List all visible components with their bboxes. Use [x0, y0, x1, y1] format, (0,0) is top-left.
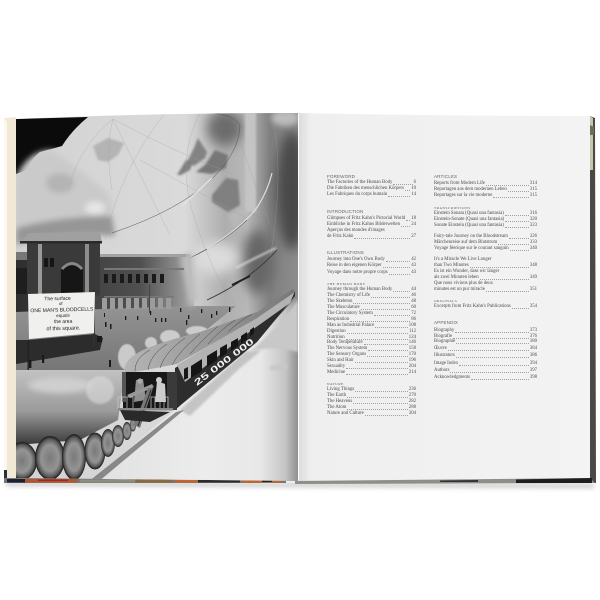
originals entry: Excerpts from Fritz Kahn's Publications [434, 304, 511, 309]
human body entries: Digestion [327, 328, 346, 334]
carriage number: 25 000 000 [192, 336, 256, 388]
articles entries: Reportagen aus dem modernen Leben [434, 187, 507, 192]
billboard: ONE MAN'S BLOODCELLS [30, 307, 94, 314]
introduction entries: 24 [411, 222, 416, 227]
introduction entries: Einblicke in Fritz Kahns Bilderwelten [327, 222, 400, 227]
subheading: nature: NATURE [327, 382, 344, 386]
human body entries: 170 [409, 352, 416, 357]
human body entries: 60 [411, 305, 416, 310]
contents column: right [434, 174, 537, 380]
foreword entries: Les Fabriques du corps humain [327, 192, 387, 197]
right page fore-edge and cover [295, 116, 596, 484]
articles entries: 315 [530, 193, 537, 198]
engineers on platform [127, 377, 166, 428]
introduction entries: de Fritz Kahn [327, 234, 353, 239]
subheading: the human body: THE HUMAN BODY [327, 282, 366, 286]
human body entries: The Musculature [327, 305, 360, 310]
foreword entries: 14 [411, 192, 416, 197]
orbit rails on the globe [112, 113, 277, 300]
heading: illustrations: ILLUSTRATIONS [327, 250, 364, 255]
human body entries: 158 [409, 346, 416, 351]
platform railings [118, 397, 168, 410]
human body entries: Body Temperature [327, 340, 363, 345]
miracle entries [434, 256, 537, 292]
articles entries: 315 [530, 187, 537, 192]
human body entries: The Sensory Organs [327, 352, 366, 357]
billboard: of [59, 301, 63, 306]
subheading: transcriptions: TRANSCRIPTIONS [434, 206, 471, 210]
right page [299, 113, 590, 481]
human body entries: Respiration [327, 317, 349, 322]
appendix entries: Authors [434, 368, 449, 373]
human body entries: 204 [409, 364, 416, 369]
blood cell chain [7, 410, 184, 482]
miracle entries: 351 [530, 286, 537, 292]
appendix entries: 398 [530, 375, 537, 380]
nature entries: 288 [409, 404, 416, 410]
transcriptions entries: 340 [530, 246, 537, 251]
human body entries: 46 [411, 293, 416, 298]
miracle entries: Que nous vivions plus de deux [434, 281, 493, 286]
appendix entries: 380 [530, 339, 537, 344]
billboard: of this square. [46, 325, 80, 332]
human body entries [327, 286, 416, 375]
human body entries: Skin and Hair [327, 358, 354, 363]
human body entries: Sexuality [327, 364, 345, 369]
foreword entries: 6 [414, 180, 416, 185]
illustrations entries: Journey into One's Own Body [327, 257, 385, 262]
miracle entries: than Two Minutes [434, 263, 469, 268]
human body entries: 86 [411, 317, 416, 322]
appendix entries: 373 [530, 328, 537, 333]
transcriptions entries: Sonate Einstein (Quasi una fantasia) [434, 222, 504, 228]
human body entries: The Chemistry of Life [327, 293, 370, 298]
miracle entries: 349 [530, 275, 537, 280]
black night sky corner [16, 117, 88, 174]
human body entries: Nutrition [327, 334, 345, 340]
heading: introduction: INTRODUCTION [327, 209, 363, 214]
smoke clouds below the plaza [16, 370, 125, 445]
human body entries: The Skeleton [327, 299, 352, 304]
nature entries: 236 [409, 387, 416, 392]
introduction entries: 27 [411, 234, 416, 239]
heading: appendix: APPENDIX [434, 320, 458, 325]
transcriptions entries: 323 [530, 222, 537, 228]
human body entries: Man as Industrial Palace [327, 323, 374, 328]
rear platform [123, 372, 167, 408]
nature entries: The Atom [327, 404, 346, 410]
illustrations entries: Voyage dans notre propre corps [327, 270, 388, 275]
billboard: the area [54, 319, 73, 325]
nature entries [327, 386, 416, 416]
appendix entries: Acknowledgments [434, 375, 470, 380]
illustrations entries: 43 [411, 270, 416, 275]
appendix entries: Biografie [434, 334, 452, 338]
illustrations entries [327, 256, 416, 275]
foreword entries: 10 [411, 186, 416, 191]
transcriptions entries: Einstein Sonata (Quasi una fantasia) [434, 211, 504, 216]
foreword entries: Die Fabriken des menschlichen Körpers [327, 186, 404, 191]
appendix entries: 394 [530, 361, 537, 366]
carriage roof [125, 289, 295, 373]
book shadow [6, 482, 594, 488]
nature entries: 270 [409, 393, 416, 398]
human body entries: 72 [411, 311, 416, 316]
billboard [16, 292, 103, 370]
transcriptions entries: 333 [530, 240, 537, 245]
human body entries: Journey through the Human Body [327, 287, 392, 292]
lower white curve of the sphere [90, 296, 298, 482]
appendix entries: 376 [530, 334, 537, 338]
introduction entries: Aperçus des mondes d'images [327, 228, 385, 233]
appendix entries: Biographie [434, 339, 455, 344]
articles entries [434, 180, 537, 198]
human body entries: 214 [409, 370, 416, 374]
pedestrians on the plaza [29, 285, 230, 368]
articles entries: 314 [530, 181, 537, 186]
appendix entries: 384 [530, 346, 537, 351]
transcriptions entries: 316 [530, 211, 537, 216]
transcriptions entries: Einstein-Sonate (Quasi una fantasia) [434, 216, 504, 222]
human body entries: The Nervous System [327, 346, 367, 351]
appendix entries: Image Index [434, 361, 458, 366]
miracle entries: Es ist ein Wunder, dass wir länger [434, 269, 499, 274]
human body entries: Medicine [327, 370, 345, 374]
miracle entries: minutes est un pur miracle [434, 286, 485, 292]
gray sphere shading beside train [180, 300, 298, 416]
miracle entries: als zwei Minuten leben [434, 275, 479, 280]
heading: foreword: FOREWORD [327, 174, 355, 179]
transcriptions entries [434, 210, 537, 251]
left page: illustration [7, 110, 308, 482]
book spread artwork [4, 113, 596, 490]
nature entries: Living Things [327, 387, 354, 392]
nature entries: Nature and Culture [327, 410, 364, 416]
appendix entries: Biography [434, 328, 454, 333]
human body entries: 124 [409, 334, 416, 340]
contents column: left [327, 174, 416, 416]
clouds over the globe [16, 150, 115, 245]
transcriptions entries: 320 [530, 216, 537, 222]
human body entries: The Circulatory System [327, 311, 373, 316]
nature entries: The Earth [327, 393, 346, 398]
subheading: originals: ORIGINALS [434, 299, 457, 303]
continents [93, 138, 241, 212]
articles entries: Reports from Modern Life [434, 181, 485, 186]
foreword entries: The Factories of the Human Body [327, 180, 392, 185]
illustrations entries: 42 [411, 257, 416, 262]
human body entries: 196 [409, 358, 416, 363]
transcriptions entries: Voyage féerique sur le courant sanguin [434, 246, 509, 251]
foreword entries [327, 179, 416, 197]
illustrations entries: Reise in den eigenen Körper [327, 263, 382, 268]
miracle entries: 348 [530, 263, 537, 268]
triumphal arch pavilion [16, 232, 102, 296]
billboard: The surface [44, 296, 71, 302]
human body entries: 112 [409, 328, 416, 334]
appendix entries: Illustrators [434, 353, 455, 358]
meridians and parallels [68, 113, 278, 305]
carriage body [175, 291, 295, 410]
train [118, 289, 295, 428]
appendix entries: Œuvre [434, 346, 447, 351]
nature entries: 282 [409, 399, 416, 404]
illustrations entries: 43 [411, 263, 416, 268]
appendix entries: 397 [530, 368, 537, 373]
globe shadow patches [196, 113, 298, 299]
carriage windows [184, 327, 254, 380]
articles entries: Reportages sur la vie moderne [434, 193, 492, 198]
transcriptions entries: 326 [530, 234, 537, 239]
globe [16, 110, 308, 482]
plaza ground [16, 306, 236, 372]
steam puffs [118, 326, 208, 370]
book cover edge and cream endpaper [4, 117, 16, 483]
human body entries: 146 [409, 340, 416, 345]
introduction entries: 18 [411, 216, 416, 221]
human body entries: 108 [409, 323, 416, 328]
cover art strip at bottom edge [4, 478, 286, 483]
human body entries: 44 [411, 287, 416, 292]
originals entry [434, 303, 537, 309]
billboard: equals [56, 313, 71, 318]
human body entries: 48 [411, 299, 416, 304]
heading: articles: ARTICLES [434, 174, 457, 179]
appendix entries: 386 [530, 353, 537, 358]
nature entries: The Heavens [327, 399, 352, 404]
nature entries: 304 [409, 410, 416, 416]
Galleria building [16, 232, 198, 312]
originals entry: 354 [530, 304, 537, 309]
transcriptions entries: Märchenreise auf dem Blutstrom [434, 240, 497, 245]
transcriptions entries: Fairy-tale Journey on the Bloodstream [434, 234, 508, 239]
miracle entries: It's a Miracle We Live Longer [434, 257, 492, 262]
appendix entries [434, 328, 537, 380]
introduction entries [327, 215, 416, 239]
introduction entries: Glimpses of Fritz Kahn's Pictorial World [327, 216, 405, 221]
